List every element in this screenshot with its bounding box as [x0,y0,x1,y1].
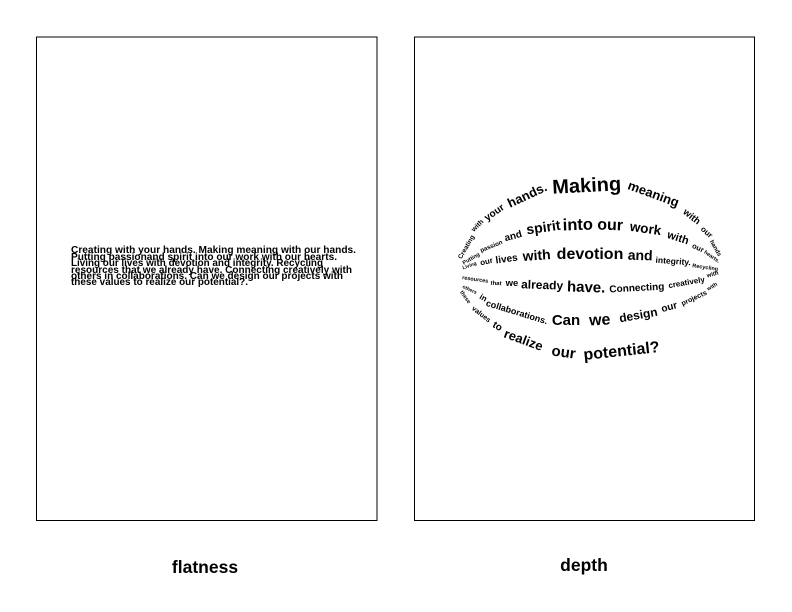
text block: warped sphere of words: Living [462,261,478,271]
text block: warped sphere of words: Creating [457,234,476,260]
panel: depth [414,37,754,520]
text block: warped sphere of words: passion [479,239,504,254]
text block: warped sphere of words: our [550,342,577,363]
text block: warped sphere of words: Recycling [692,263,718,273]
text block: warped sphere of words: meaning [626,178,681,210]
text block: overlapping flat lines: others in collaborations. Can we design our projects with [71,270,343,282]
text block: overlapping flat lines: resources that we already have. Connecting creatively with [71,264,352,276]
text block: warped sphere of words: into [562,215,593,235]
text block: warped sphere of words: hands. [505,179,549,211]
text block: warped sphere of words: already [521,277,564,293]
text block: warped sphere of words: hands [708,239,722,258]
text block: warped sphere of words: with [521,246,551,264]
text block: warped sphere of words: others [461,284,478,296]
text block: warped sphere of words: in [478,292,489,304]
text block: warped sphere of words: Putting [462,252,481,266]
text block: warped sphere of words: Can [552,312,580,329]
text block: warped sphere of words: resources [462,275,489,285]
text block: warped sphere of words: to [490,320,504,334]
text block: overlapping flat lines: Living our lives with devotion and integrity. Recycling [71,257,323,269]
text block: warped sphere of words: work [628,219,663,238]
text block: warped sphere of words: these [458,290,471,305]
text block: warped sphere of words: have. [567,278,606,297]
text block: warped sphere of words: design [618,305,659,325]
text block: warped sphere of words: we [588,311,611,330]
text block: warped sphere of words: realize [502,326,545,354]
text block: warped sphere of words: collaborations. [485,298,549,326]
text block: warped sphere of words: with [680,206,703,227]
text block: warped sphere of words: with [470,219,485,234]
text block: warped sphere of words: our [479,256,494,267]
text block: warped sphere of words: our [660,300,679,315]
text block: warped sphere of words: our [597,217,623,234]
text block: warped sphere of words: projects [681,290,708,308]
caption: depth: depth [560,555,608,575]
text block: overlapping flat lines: these values to realize our potential?. [71,276,248,288]
text block: overlapping flat lines: Putting passionand spirit into our work with our hearts. [71,251,337,263]
text block: overlapping flat lines [71,244,356,288]
text block: warped sphere of words: devotion [557,246,623,263]
text block: warped sphere of words: our [691,241,706,254]
text block: warped sphere of words: with [665,229,691,247]
text block: warped sphere of words: your [483,202,507,224]
text block: warped sphere of words: and [627,247,653,263]
text block: warped sphere of words: values [470,305,492,324]
text block: overlapping flat lines: Creating with your hands. Making meaning with our hands. [71,244,356,256]
caption: flatness: flatness [172,557,238,577]
text block: warped sphere of words: and [503,229,523,244]
text block: warped sphere of words: Making [552,173,622,199]
text block: warped sphere of words: potential? [583,339,660,364]
text block: warped sphere of words: that [490,281,502,287]
text block: warped sphere of words: creatively [668,275,706,290]
text block: warped sphere of words [457,173,722,364]
text block: warped sphere of words: our [699,224,714,240]
text block: warped sphere of words: with [705,281,719,293]
panel: flatness [36,37,377,520]
text block: warped sphere of words: Connecting [609,282,665,295]
text block: warped sphere of words: with [705,270,720,280]
text block: warped sphere of words: integrity. [655,255,691,267]
text block: warped sphere of words: spirit [525,217,562,237]
text block: warped sphere of words: hearts. [702,250,721,265]
text block: warped sphere of words: lives [495,252,519,267]
text block: warped sphere of words: we [505,278,518,289]
